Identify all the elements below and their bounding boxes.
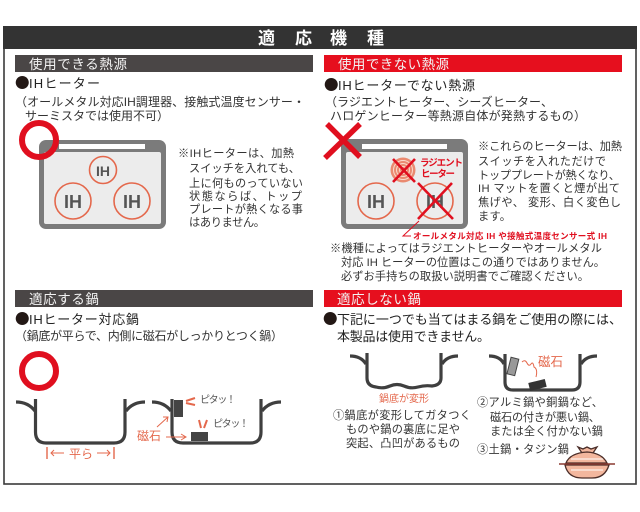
title bar: 機 xyxy=(330,29,347,48)
subheading: IH compatible pots xyxy=(15,308,139,329)
label: magnet: 磁石 xyxy=(538,355,563,369)
heading bar: unusable heat sources: 使用できない熱源 xyxy=(338,56,450,72)
note: model differences: 対応 IH ヒーターの位置はこの通りではありません。 xyxy=(341,256,605,269)
text: IH conditions: サーミスタでは使用不可） xyxy=(25,108,169,123)
note: IH heater: はありません。 xyxy=(189,216,265,229)
text: IH conditions: （オールメタル対応IH調理器、接触式温度センサー・ xyxy=(15,94,305,109)
icon: tagine pot xyxy=(559,447,615,478)
note: IH heater: ※IHヒーターは、加熱 xyxy=(178,147,294,160)
text: warning xyxy=(323,308,622,344)
icon: IH cooktop: IH xyxy=(64,192,82,212)
note: these heaters xyxy=(478,140,622,223)
label: flat: 平ら xyxy=(69,447,93,461)
text: warning: 下記に一つでも当てはまる鍋をご使用の際には、 xyxy=(337,312,622,327)
label: stick sound side xyxy=(186,394,236,406)
icon: red circle OK xyxy=(22,123,56,157)
text: item 1: ものや鍋の裏底に足や xyxy=(346,423,460,436)
subheading: IH compatible pots: ● xyxy=(15,308,30,329)
panel: compatible pots xyxy=(15,290,313,461)
text: non-IH source types: （ラジエントヒーター、シーズヒーター、 xyxy=(325,94,553,109)
icon: red circle OK xyxy=(22,354,56,388)
text: item 2: ②アルミ鍋や銅鍋など、 xyxy=(477,395,603,409)
text: item 3: ③土鍋・タジン鍋 xyxy=(477,443,569,456)
text: item 1: ①鍋底が変形してガタつく xyxy=(333,408,471,422)
title bar xyxy=(3,26,637,49)
text: IH conditions xyxy=(15,94,305,123)
heading bar: incompatible pots: 適応しない鍋 xyxy=(337,292,421,307)
panel: unusable heat sources xyxy=(324,55,622,283)
label: stick sound side: ピタッ！ xyxy=(200,394,236,406)
label: magnet with arrows: 磁石 xyxy=(137,429,161,443)
callout: all-metal IH xyxy=(403,221,607,241)
note: IH heater: 状態ならば、トップ xyxy=(189,189,302,203)
icon: IH cooktop xyxy=(39,140,166,229)
text: item 1 xyxy=(333,408,471,450)
subheading: IH heater: IHヒーター xyxy=(29,76,100,91)
subheading: IH heater xyxy=(15,72,100,93)
label: radiant heater: ヒーター xyxy=(421,168,455,180)
text: item 1: 突起、凸凹があるもの xyxy=(346,436,460,450)
callout: all-metal IH: オールメタル対応 IH や接触式温度センサー式 IH xyxy=(413,231,607,241)
text: non-IH source types xyxy=(325,94,586,123)
subheading: IH compatible pots: IHヒーター対応鍋 xyxy=(29,312,139,327)
heading bar: usable heat sources: 使用できる熱源 xyxy=(29,56,128,72)
panel: incompatible pots xyxy=(323,290,622,478)
text: warning: ● xyxy=(323,308,338,329)
text: compatible pot description: （鍋底が平らで、内側に磁石がしっかりとつく鍋） xyxy=(15,328,283,343)
panel: usable heat sources xyxy=(15,55,313,229)
label: stick sound bottom: ピタッ！ xyxy=(213,418,249,430)
note: these heaters: スイッチを入れただけで xyxy=(478,155,606,168)
subheading: IH heater: ● xyxy=(15,72,30,93)
title bar: 種 xyxy=(367,29,384,48)
note: model differences: 必ずお手持ちの取扱い説明書でご確認ください。 xyxy=(341,269,589,283)
text: item 2 xyxy=(477,395,603,438)
label: deformed bottom: 鍋底が変形 xyxy=(379,392,429,405)
label: radiant heater: ラジエント xyxy=(420,158,463,169)
subheading: non-IH sources xyxy=(324,74,475,95)
subheading: non-IH sources: ● xyxy=(324,74,338,95)
note: IH heater: プレートが熱くなる事 xyxy=(189,202,303,216)
icon: cooktop with radiant heater xyxy=(341,139,468,229)
heading bar: usable heat sources xyxy=(15,55,313,72)
note: IH heater: スイッチを入れても、 xyxy=(189,162,300,175)
label: magnet with arrows xyxy=(137,417,186,443)
title bar: 応 xyxy=(295,29,312,48)
icon: flat pot xyxy=(16,399,145,443)
icon: cooktop with radiant heater: IH xyxy=(426,192,444,212)
note: these heaters: IH マットを置くと煙が出て xyxy=(478,181,620,195)
heading bar: compatible pots xyxy=(15,290,313,307)
text: non-IH source types: ハロゲンヒーター等熱源自体が発熱するもの） xyxy=(330,108,586,123)
subheading: non-IH sources: IHヒーターでない熱源 xyxy=(338,78,475,93)
note: these heaters: ※これらのヒーターは、加熱 xyxy=(478,140,622,153)
note: model differences xyxy=(330,241,605,283)
icon: red X xyxy=(325,124,360,158)
icon: IH cooktop: IH xyxy=(123,192,141,212)
label: stick sound bottom xyxy=(199,418,249,430)
icon: pot with magnets xyxy=(152,399,281,443)
label: radiant heater xyxy=(420,158,463,180)
icon: pot with falling magnet xyxy=(489,354,597,391)
heading bar: incompatible pots xyxy=(324,290,622,307)
icon: IH cooktop: IH xyxy=(96,163,110,179)
note: these heaters: 焦げや、 変形、白く変色し xyxy=(478,195,621,209)
title bar: 適 xyxy=(258,29,275,48)
icon: cooktop with radiant heater: IH xyxy=(367,192,385,212)
note: IH heater xyxy=(178,147,303,229)
heading bar: unusable heat sources xyxy=(324,55,622,72)
text: item 2: 磁石の付きが悪い鍋、 xyxy=(490,410,600,424)
icon: deformed pot xyxy=(350,353,458,388)
note: these heaters: ます。 xyxy=(478,210,511,223)
text: warning: 本製品は使用できません。 xyxy=(337,329,490,344)
heading bar: compatible pots: 適応する鍋 xyxy=(29,292,99,307)
note: these heaters: トッププレートが熱くなり、 xyxy=(478,168,620,182)
note: model differences: ※機種によってはラジエントヒーターやオールメタル xyxy=(330,241,602,255)
label: flat xyxy=(47,447,114,461)
text: item 2: または全く付かない鍋 xyxy=(490,424,603,438)
note: IH heater: 上に何ものっていない xyxy=(189,177,303,190)
